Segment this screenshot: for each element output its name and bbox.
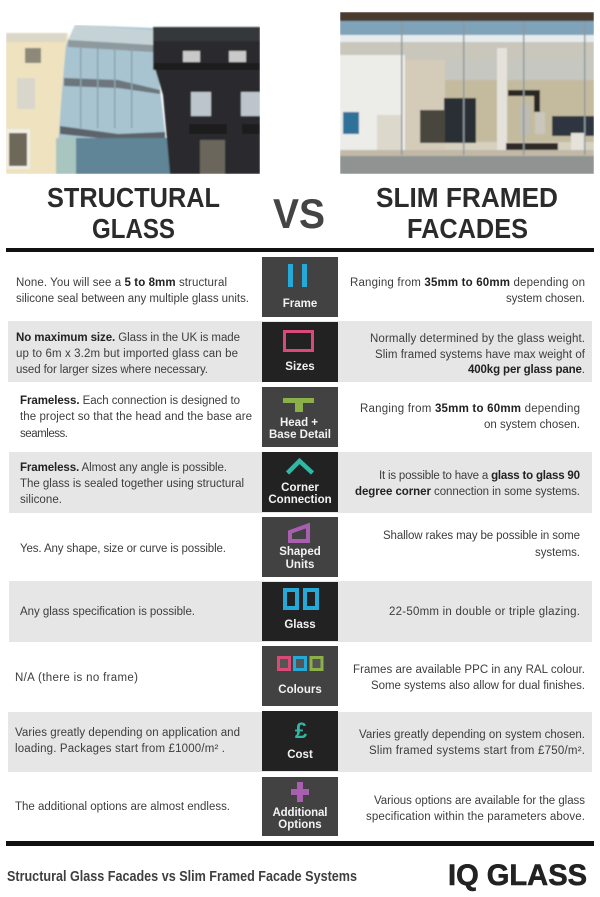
text: cost left: Varies greatly depending on application and: [15, 727, 240, 739]
text: frame right: [350, 277, 585, 305]
bottom rule: [6, 841, 594, 846]
text: sizes left: used for larger sizes where necessary.: [16, 364, 208, 376]
icon tile: corner connection: Connection: [268, 494, 332, 506]
text: head and base right: on system chosen.: [484, 419, 580, 431]
text: frame left: [16, 277, 249, 305]
text: corner left: The glass is sealed together using structural: [20, 478, 244, 490]
heading: slim framed facades: [376, 182, 558, 244]
text: shaped left: Yes. Any shape, size or curve is possible.: [20, 543, 226, 555]
text: colours left: N/A (there is no frame): [15, 672, 138, 684]
text: head and base left: the project so that the head and the base are: [20, 411, 252, 423]
text: additional right: Various options are available for the glass: [374, 795, 585, 807]
text: shaped right: systems.: [535, 547, 580, 559]
icon tile: colours: [262, 646, 338, 706]
text: additional right: [366, 795, 585, 823]
text: frame right: Ranging from 35mm to 60mm depending on: [350, 277, 585, 289]
row band: corner connection: [9, 452, 592, 513]
heading: structural glass: [47, 182, 220, 244]
text: cost right: Varies greatly depending on system chosen.: [359, 729, 585, 741]
text: corner left: Frameless. Almost any angle is possible.: [20, 462, 227, 474]
text: cost right: Slim framed systems start from £750/m².: [369, 745, 585, 757]
heading: structural glass: STRUCTURAL: [47, 182, 220, 213]
text: corner left: silicone.: [20, 494, 62, 506]
text: sizes left: No maximum size. Glass in the UK is made: [16, 332, 240, 344]
text: colours right: Frames are available PPC in any RAL colour.: [353, 664, 585, 676]
icon tile: head and base detail: Head +: [280, 417, 318, 429]
icon tile: head and base detail: [262, 387, 338, 447]
icon tile: shaped units: Shaped: [279, 546, 321, 558]
icon tile: shaped units: [262, 517, 338, 577]
icon tile: shaped units: Units: [286, 559, 314, 571]
text: colours right: Some systems also allow for dual finishes.: [371, 680, 585, 692]
text: head and base right: Ranging from 35mm to 60mm depending: [360, 403, 580, 415]
icon tile: frame: [262, 257, 338, 317]
icon tile: frame: Frame: [283, 298, 317, 310]
text: shaped right: [383, 530, 580, 559]
text: sizes left: up to 6m x 3.2m but imported glass can be: [16, 348, 238, 360]
logo: IQ Glass: IQ GLASS: [448, 859, 587, 892]
text: head and base left: seamless.: [20, 428, 68, 440]
text: sizes right: Normally determined by the glass weight.: [370, 333, 585, 345]
text: shaped right: Shallow rakes may be possible in some: [383, 530, 580, 542]
text: cost left: loading. Packages start from £1000/m² .: [15, 743, 225, 755]
text: sizes right: [370, 333, 586, 376]
heading: VS: VS: [273, 190, 325, 237]
text: sizes left: [16, 332, 240, 376]
icon tile: corner connection: [262, 452, 338, 512]
text: cost left: [15, 727, 240, 755]
icon tile: cost: [262, 711, 338, 771]
row band: glass: [9, 581, 592, 642]
icon tile: sizes: Sizes: [285, 361, 315, 373]
text: head and base right: [360, 403, 580, 431]
text: glass right: 22-50mm in double or triple glazing.: [389, 606, 580, 618]
text: head and base left: Frameless. Each connection is designed to: [20, 395, 240, 407]
icon tile: additional options: Additional: [272, 807, 328, 819]
text: frame left: None. You will see a 5 to 8mm structural: [16, 277, 227, 289]
text: glass left: Any glass specification is possible.: [20, 606, 195, 618]
icon tile: cost: £: [295, 718, 308, 743]
text: corner left: [20, 462, 244, 506]
heading: slim framed facades: FACADES: [407, 213, 528, 244]
icon tile: cost: Cost: [287, 749, 313, 761]
text: corner right: It is possible to have a glass to glass 90: [379, 470, 580, 482]
icon tile: glass: [262, 582, 338, 641]
text: cost right: [359, 729, 585, 757]
top rule: [6, 248, 594, 252]
text: frame right: system chosen.: [506, 293, 585, 305]
icon tile: additional options: [262, 777, 338, 836]
photo: slim framed shopfront: [340, 12, 594, 174]
icon tile: corner connection: Corner: [281, 482, 319, 494]
photo: structural glass building: [6, 25, 260, 174]
icon tile: additional options: Options: [278, 819, 322, 831]
text: corner right: [355, 470, 580, 498]
icon tile: head and base detail: Base Detail: [269, 429, 331, 441]
text: colours right: [353, 664, 585, 692]
heading: slim framed facades: SLIM FRAMED: [376, 182, 558, 213]
text: additional left: The additional options are almost endless.: [15, 801, 230, 813]
icon tile: colours: Colours: [278, 684, 322, 696]
text: frame left: silicone seal between any multiple glass units.: [16, 293, 249, 305]
text: sizes right: Slim framed systems have max weight of: [375, 349, 586, 361]
text: head and base left: [20, 395, 252, 440]
text: corner right: degree corner connection in some systems.: [355, 486, 580, 498]
heading: structural glass: GLASS: [92, 213, 175, 244]
footer title: Structural Glass Facades vs Slim Framed Facade Systems: [7, 869, 357, 885]
row band: sizes: [8, 321, 592, 382]
text: sizes right: 400kg per glass pane.: [468, 364, 585, 376]
row band: cost: [8, 712, 592, 772]
icon tile: sizes: [262, 322, 338, 382]
icon tile: glass: Glass: [284, 619, 316, 631]
text: additional right: specification within the parameters above.: [366, 811, 585, 823]
